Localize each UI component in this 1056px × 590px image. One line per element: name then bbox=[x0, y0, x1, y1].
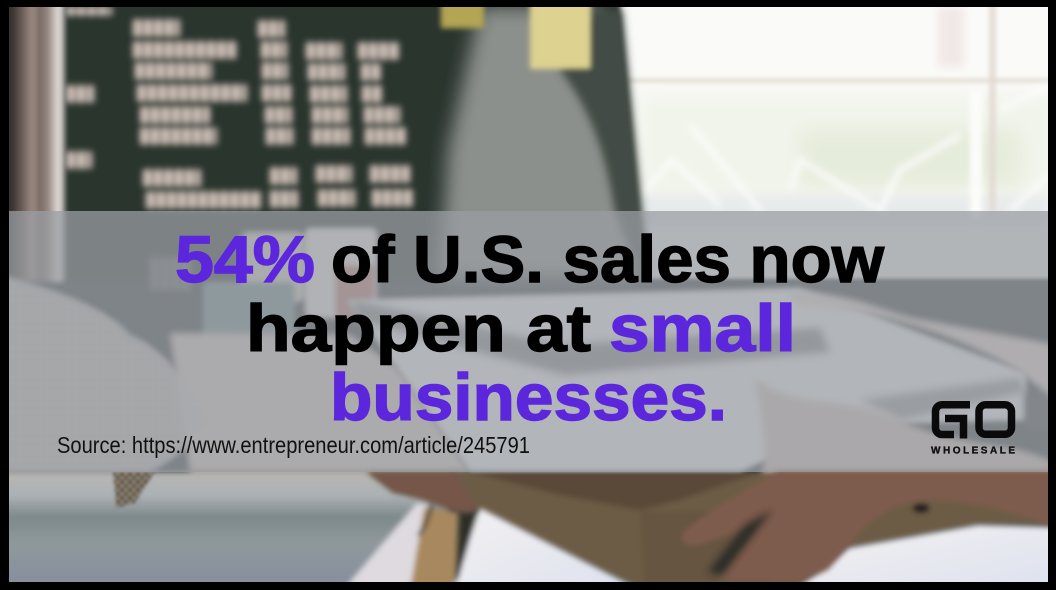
photo: patterned sleeve and arm bbox=[0, 275, 470, 508]
logo mark: GO bbox=[936, 405, 1012, 438]
headline line 2: happen at bbox=[246, 291, 591, 365]
photo: bright window bbox=[615, 0, 1056, 278]
photo: hands holding box bbox=[367, 470, 1056, 582]
logo: GO Wholesale bbox=[931, 405, 1015, 456]
photo: cans on counter bbox=[203, 228, 377, 342]
headline line 1: 54% bbox=[175, 222, 315, 296]
headline bbox=[175, 222, 885, 434]
photo: menu board lettering (blurred blobs) bbox=[66, 11, 413, 282]
headline line 3: businesses. bbox=[330, 360, 727, 434]
source citation: Source: https://www.entrepreneur.com/article/245791 bbox=[57, 432, 530, 458]
logo wordmark: WHOLESALE bbox=[931, 446, 1015, 456]
headline line 1: of U.S. sales now bbox=[331, 222, 885, 296]
photo: chalk menu board bbox=[65, 0, 648, 280]
headline line 2: small bbox=[609, 291, 796, 365]
translucent grey text band bbox=[9, 211, 1048, 472]
photo: metal pole bbox=[9, 0, 65, 282]
photo: parcel lid bbox=[347, 288, 1056, 472]
photo: counter surface bbox=[0, 472, 449, 590]
photo: right arm reaching over parcel bbox=[755, 293, 1056, 480]
photo: cardboard box body bbox=[367, 472, 1056, 590]
photo: white surface under box bbox=[343, 503, 1056, 590]
